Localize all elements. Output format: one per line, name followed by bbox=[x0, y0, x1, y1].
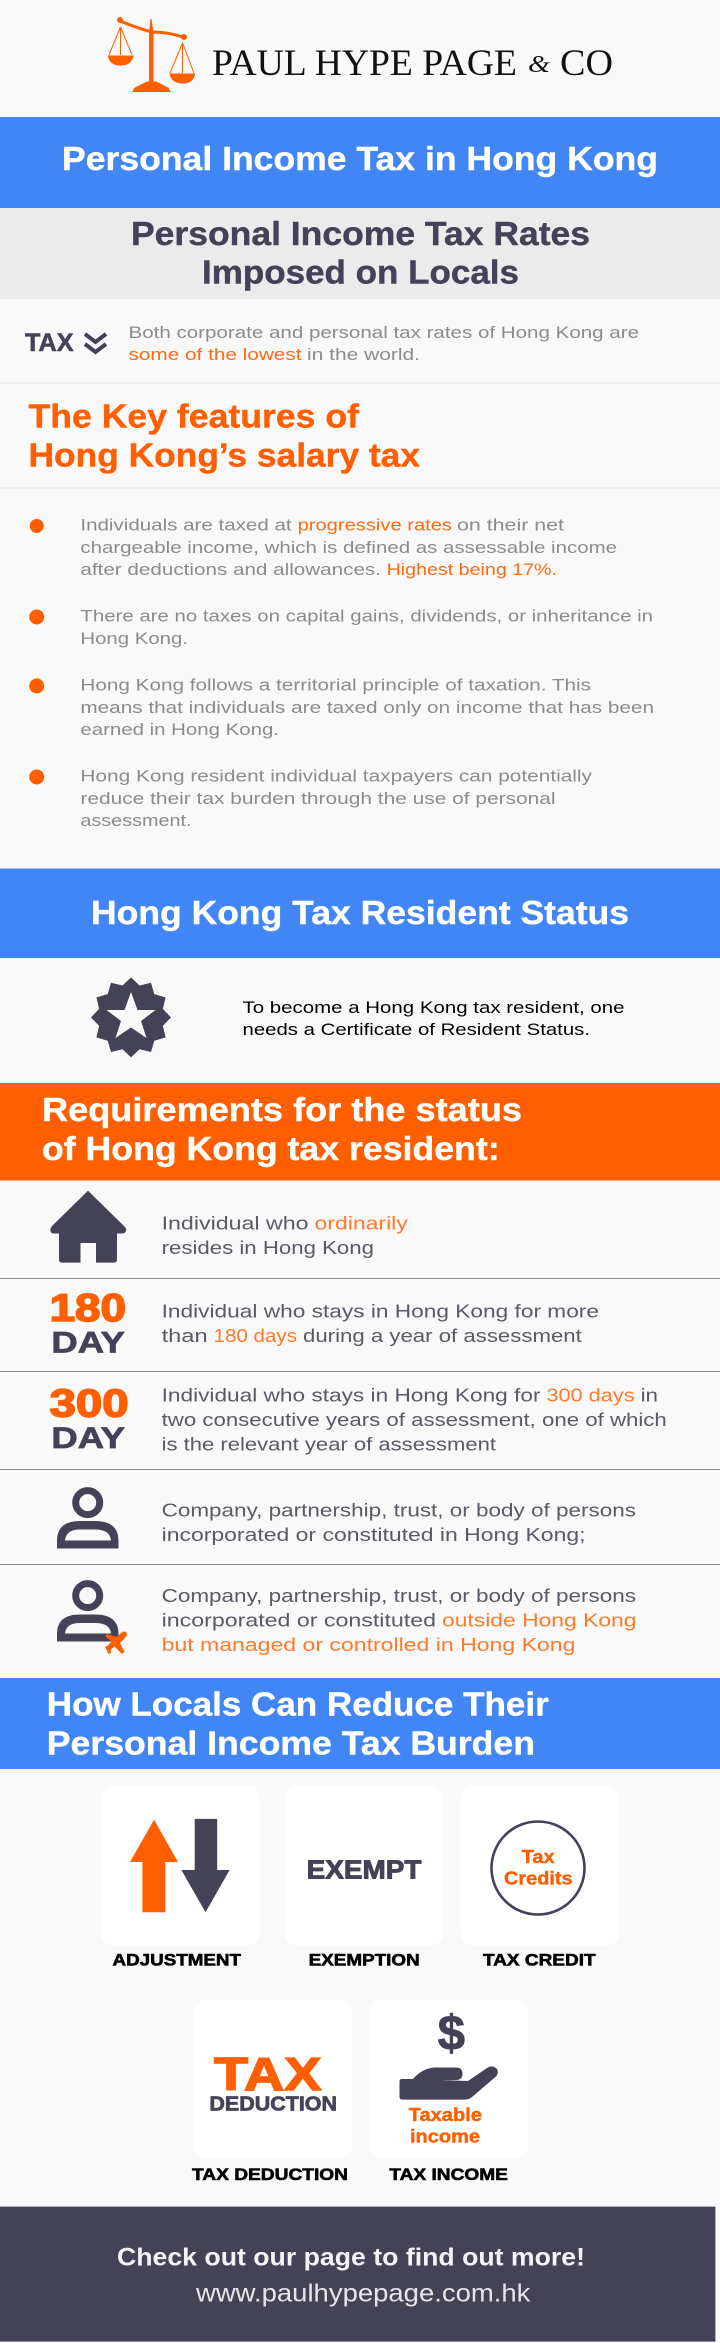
logo bbox=[108, 18, 613, 92]
note text: Both corporate and personal tax rates of Hong Kong are bbox=[128, 323, 639, 342]
note text: some of the lowest bbox=[128, 345, 302, 364]
company name: PAUL HYPE PAGE bbox=[212, 43, 517, 84]
footer: call to action: www.paulhypepage.com.hk bbox=[195, 2280, 531, 2308]
row: company outside Hong Kong bbox=[57, 1584, 636, 1655]
label: TAX INCOME bbox=[389, 2165, 508, 2184]
text bbox=[162, 1212, 409, 1258]
icon: tax down: TAX bbox=[25, 329, 74, 357]
footer: call to action: Check out our page to find out more! bbox=[117, 2244, 585, 2272]
text: Individual who bbox=[162, 1212, 309, 1233]
bullet 3 bbox=[29, 676, 654, 739]
banner: reduce tax burden: Personal Income Tax Burden bbox=[47, 1724, 535, 1762]
panel: subtitle bbox=[0, 208, 720, 299]
bullet 4 bbox=[29, 767, 593, 830]
icon: tax deduction words bbox=[209, 2048, 337, 2116]
text: Individual who stays in Hong Kong for bbox=[162, 1385, 540, 1406]
banner: requirements bbox=[0, 1083, 720, 1180]
panel: subtitle: Imposed on Locals bbox=[202, 254, 519, 290]
icon: 180 day: DAY bbox=[51, 1327, 125, 1360]
card: tax income bbox=[370, 2000, 528, 2184]
text bbox=[162, 1499, 636, 1545]
text bbox=[162, 1585, 636, 1655]
icon: tax deduction words: TAX bbox=[214, 2048, 322, 2100]
text: outside Hong Kong bbox=[442, 1610, 636, 1631]
banner: main title: Personal Income Tax in Hong Kong bbox=[62, 140, 658, 177]
banner: reduce tax burden: How Locals Can Reduce Their bbox=[47, 1686, 549, 1723]
heading: key features: Hong Kong’s salary tax bbox=[28, 436, 421, 474]
icon: star badge bbox=[91, 977, 171, 1057]
icon: 180 day bbox=[50, 1287, 126, 1360]
text: is the relevant year of assessment bbox=[162, 1434, 496, 1454]
bullet 3: Hong Kong follows a territorial principle of taxation. This bbox=[80, 676, 591, 695]
icon: 300 day bbox=[50, 1382, 129, 1455]
bullet 1: Highest being 17%. bbox=[387, 560, 557, 579]
bullet 3: means that individuals are taxed only on income that has been bbox=[80, 698, 654, 717]
text: 300 days bbox=[546, 1385, 635, 1406]
icon: up and down arrows bbox=[130, 1819, 230, 1912]
bullet 4: Hong Kong resident individual taxpayers can potentially bbox=[80, 767, 593, 786]
note text: in the world. bbox=[307, 345, 420, 364]
icon: tax credits circle: Credits bbox=[504, 1868, 573, 1888]
text: Company, partnership, trust, or body of persons bbox=[162, 1499, 636, 1520]
text bbox=[162, 1385, 667, 1454]
text: but managed or controlled in Hong Kong bbox=[162, 1634, 575, 1655]
banner: resident status bbox=[0, 868, 720, 958]
icon: dollar over hand bbox=[400, 2007, 498, 2147]
icon: house bbox=[50, 1191, 126, 1263]
list: key features bbox=[29, 516, 654, 830]
bullet 1: Individuals are taxed at bbox=[80, 516, 292, 535]
banner: reduce tax burden bbox=[0, 1678, 720, 1769]
icon: person bbox=[57, 1491, 118, 1548]
text: Individual who stays in Hong Kong for more bbox=[162, 1300, 599, 1321]
bullet 1: on their net bbox=[457, 516, 564, 535]
bullet 3: earned in Hong Kong. bbox=[80, 720, 279, 739]
row: 180 days bbox=[50, 1287, 599, 1360]
certificate text: To become a Hong Kong tax resident, one bbox=[242, 998, 624, 1017]
icon: dollar over hand: Taxable bbox=[409, 2105, 482, 2125]
icon: tax down bbox=[25, 329, 106, 357]
label: TAX CREDIT bbox=[483, 1951, 596, 1970]
text: resides in Hong Kong bbox=[162, 1237, 374, 1258]
icon: person with plane bbox=[57, 1584, 127, 1654]
card: adjustment bbox=[101, 1786, 260, 1970]
bullet 1: after deductions and allowances. bbox=[80, 560, 381, 579]
icon: 180 day: 180 bbox=[50, 1287, 126, 1330]
company name: CO bbox=[560, 43, 613, 84]
certificate text: needs a Certificate of Resident Status. bbox=[242, 1020, 590, 1039]
bullet 2: Hong Kong. bbox=[80, 629, 188, 648]
panel: low tax note bbox=[25, 323, 639, 364]
banner: main title bbox=[0, 117, 720, 208]
icon: tax deduction words: DEDUCTION bbox=[209, 2094, 337, 2116]
row: company in Hong Kong bbox=[57, 1491, 636, 1548]
bullet 2 bbox=[29, 607, 653, 648]
card: exemption bbox=[285, 1786, 443, 1970]
bullet 1: chargeable income, which is defined as assessable income bbox=[80, 538, 617, 557]
bullet 4: reduce their tax burden through the use of personal bbox=[80, 789, 556, 808]
text: incorporated or constituted bbox=[162, 1610, 436, 1631]
label: TAX DEDUCTION bbox=[192, 2165, 348, 2184]
row: 300 days bbox=[50, 1382, 667, 1455]
label: ADJUSTMENT bbox=[112, 1951, 242, 1970]
heading: key features: The Key features of bbox=[28, 398, 360, 434]
text: 180 days bbox=[214, 1325, 297, 1346]
icon: tax credits circle bbox=[492, 1822, 584, 1914]
banner: resident status: Hong Kong Tax Resident Status bbox=[91, 894, 629, 931]
bullet 1: progressive rates bbox=[298, 516, 452, 535]
label: EXEMPTION bbox=[309, 1951, 420, 1970]
icon: 300 day: 300 bbox=[50, 1382, 129, 1426]
card: tax credit bbox=[461, 1786, 619, 1970]
heading: key features bbox=[28, 398, 421, 474]
row: ordinarily resides bbox=[50, 1191, 409, 1263]
text: incorporated or constituted in Hong Kong; bbox=[162, 1524, 586, 1545]
icon: scales of justice bbox=[108, 18, 194, 92]
bullet 2: There are no taxes on capital gains, dividends, or inheritance in bbox=[80, 607, 653, 626]
text: ordinarily bbox=[314, 1212, 409, 1233]
banner: requirements: of Hong Kong tax resident: bbox=[42, 1130, 500, 1167]
panel: certificate bbox=[91, 977, 624, 1057]
panel: subtitle: Personal Income Tax Rates bbox=[131, 215, 590, 252]
text: during a year of assessment bbox=[303, 1325, 582, 1346]
banner: requirements: Requirements for the status bbox=[42, 1091, 522, 1128]
company name: & bbox=[528, 52, 550, 78]
text: Company, partnership, trust, or body of persons bbox=[162, 1585, 636, 1606]
footer: call to action bbox=[0, 2207, 715, 2342]
text: than bbox=[162, 1325, 208, 1346]
certificate text bbox=[242, 998, 624, 1039]
icon: dollar over hand: $ bbox=[438, 2007, 465, 2061]
bullet 4: assessment. bbox=[80, 811, 192, 830]
icon: tax credits circle: Tax bbox=[522, 1847, 555, 1867]
text bbox=[162, 1300, 599, 1346]
text: two consecutive years of assessment, one of which bbox=[162, 1409, 667, 1430]
icon: exempt word: EXEMPT bbox=[307, 1854, 422, 1884]
icon: dollar over hand: income bbox=[410, 2127, 480, 2147]
text: in bbox=[641, 1385, 658, 1406]
bullet 1 bbox=[30, 516, 617, 579]
card: tax deduction bbox=[192, 2000, 352, 2184]
icon: 300 day: DAY bbox=[51, 1422, 125, 1455]
note text bbox=[128, 323, 639, 364]
